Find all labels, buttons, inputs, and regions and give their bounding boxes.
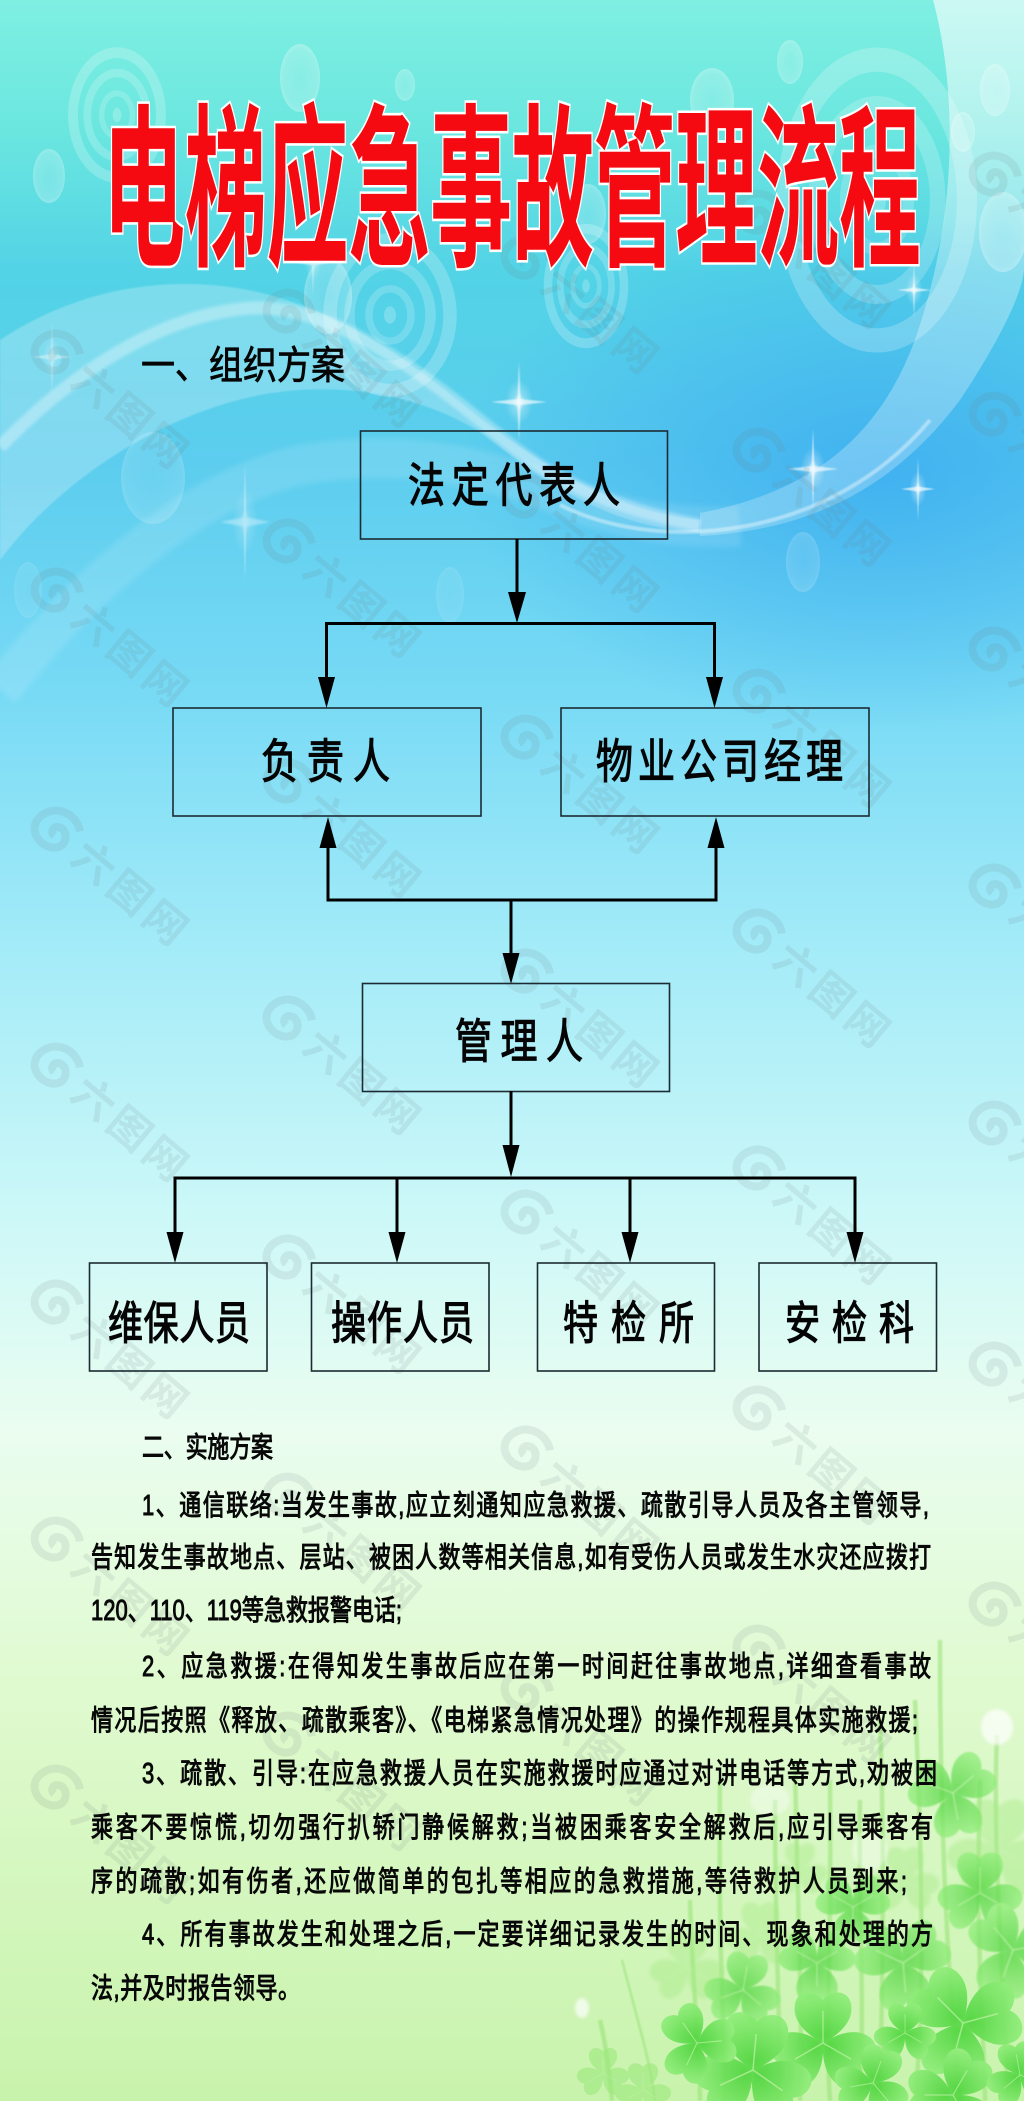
watermark grid: 六图网 xyxy=(533,974,666,1096)
box: safety inspection section: 安检科 xyxy=(785,1298,914,1349)
watermark grid: 六图网 xyxy=(533,1451,666,1573)
item 2: 2、应急救援:在得知发生事故后应在第一时间赶往事故地点,详细查看事故 xyxy=(142,1651,931,1683)
box: legal representative: 法定代表人 xyxy=(408,461,620,513)
box: special inspection office: 特检所 xyxy=(563,1298,694,1349)
box: responsible person: 负责人 xyxy=(261,737,390,789)
watermark grid: 六图网 xyxy=(63,1068,196,1190)
arrow: to manager xyxy=(502,900,520,984)
box: responsible person xyxy=(173,708,481,816)
item 3: 乘客不要惊慌,切勿强行扒轿门静候解救;当被困乘客安全解救后,应引导乘客有 xyxy=(91,1812,933,1844)
item 3: 序的疏散;如有伤者,还应做简单的包扎等相应的急救措施,等待救护人员到来; xyxy=(91,1866,907,1898)
watermark grid: 六图网 xyxy=(295,784,428,906)
item 3 xyxy=(91,1758,937,1898)
item 4 xyxy=(91,1919,933,2005)
arrow: legal representative to split xyxy=(508,539,526,623)
item 1 xyxy=(91,1490,931,1627)
watermark grid: 六图网 xyxy=(295,1260,428,1382)
watermark grid: 六图网 xyxy=(295,544,428,666)
clover meadow xyxy=(574,1640,1024,2101)
box: operators xyxy=(312,1263,489,1371)
box: property company manager xyxy=(561,708,869,816)
item 3: 3、疏散、引导:在应急救援人员在实施救援时应通过对讲电话等方式,劝被困 xyxy=(142,1758,937,1790)
watermark grid: 六图网 xyxy=(63,593,196,715)
item 2 xyxy=(91,1651,931,1737)
watermark grid: 六图网 xyxy=(765,694,898,816)
watermark grid: 六图网 xyxy=(765,453,898,575)
watermark grid: 六图网 xyxy=(63,355,196,477)
watermark grid: 六图网 xyxy=(533,1692,666,1814)
watermark grid: 六图网 xyxy=(63,1542,196,1664)
heading: implementation plan: 二、实施方案 xyxy=(142,1432,273,1464)
heading: organization plan: 一、组织方案 xyxy=(141,344,345,388)
implementation plan text xyxy=(91,1432,937,2005)
watermark grid: 六图网 xyxy=(295,1021,428,1143)
watermark grid: 六图网 xyxy=(765,1171,898,1293)
watermark grid: 六图网 xyxy=(295,1737,428,1859)
item 1: 告知发生事故地点、层站、被困人数等相关信息,如有受伤人员或发生水灾还应拨打 xyxy=(91,1542,931,1574)
watermark grid: 六图网 xyxy=(765,1411,898,1533)
decorative ribbons xyxy=(0,0,1024,690)
decorative rings and bubbles xyxy=(14,40,1024,623)
decorative sparkles xyxy=(32,231,935,582)
connector with arrows up to second level xyxy=(320,817,724,900)
box: manager: 管理人 xyxy=(455,1017,583,1069)
watermark grid: 六图网 xyxy=(533,740,666,862)
watermark grid: 六图网 xyxy=(765,215,898,337)
box: maintenance staff: 维保人员 xyxy=(108,1298,250,1349)
watermark grid: 六图网 xyxy=(765,1650,898,1772)
watermark grid: 六图网 xyxy=(765,934,898,1056)
watermark grid: 六图网 xyxy=(533,260,666,382)
watermark grid: 六图网 xyxy=(533,499,666,621)
item 1: 1、通信联络:当发生事故,应立刻通知应急救援、疏散引导人员及各主管领导, xyxy=(142,1490,929,1522)
box: special inspection office xyxy=(538,1263,714,1371)
box: property company manager: 物业公司经理 xyxy=(596,737,843,789)
watermark grid: 六图网 xyxy=(63,832,196,954)
org chart xyxy=(90,431,936,1371)
item 1: 120、110、119等急救报警电话; xyxy=(91,1595,402,1627)
box: operators: 操作人员 xyxy=(331,1298,474,1349)
watermark grid: 六图网 xyxy=(295,314,428,436)
box: safety inspection section xyxy=(759,1263,936,1371)
box: manager xyxy=(362,984,670,1092)
connector with arrows to second level xyxy=(318,624,723,708)
connector with arrows to third level xyxy=(166,1178,864,1263)
title: 电梯应急事故管理流程 xyxy=(103,94,921,290)
arrow: manager to split xyxy=(502,1091,520,1177)
watermark grid: 六图网 xyxy=(533,1215,666,1337)
item 2: 情况后按照《释放、疏散乘客》、《电梯紧急情况处理》的操作规程具体实施救援; xyxy=(91,1705,918,1737)
box: legal representative xyxy=(360,431,668,539)
watermark grid: 六图网 xyxy=(295,1498,428,1620)
box: maintenance staff xyxy=(90,1263,267,1371)
item 4: 4、所有事故发生和处理之后,一定要详细记录发生的时间、现象和处理的方 xyxy=(142,1919,933,1951)
item 4: 法,并及时报告领导。 xyxy=(91,1973,300,2005)
watermark grid: 六图网 xyxy=(63,1305,196,1427)
watermark grid: 六图网 xyxy=(63,1790,196,1912)
